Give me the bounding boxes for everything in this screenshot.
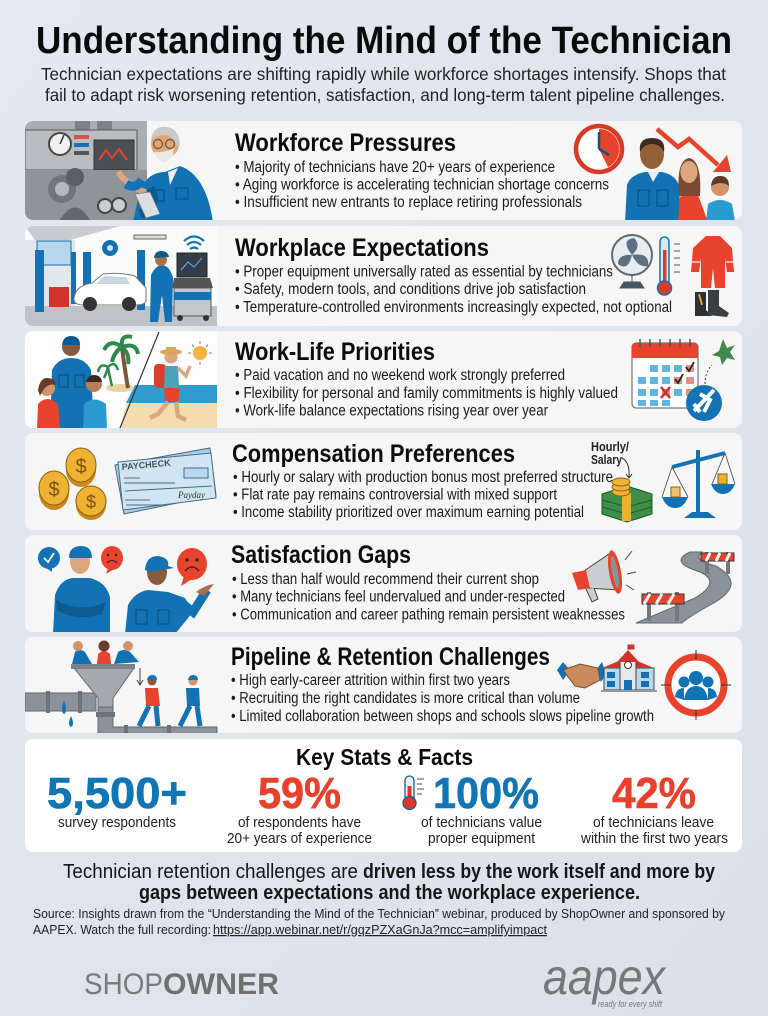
callout: hourly/salary: Salary: [591, 453, 622, 467]
subtitle: [41, 64, 726, 105]
icon: palm leaf: [712, 339, 735, 365]
bullet list: • Proper equipment universally rated as essential by technicians: [235, 264, 613, 280]
icon: check speech bubble: [38, 547, 60, 572]
illustration: gold coins: [39, 448, 106, 520]
bullet list: • Temperature-controlled environments increasingly expected, not optional: [235, 299, 672, 316]
logo: aapex: ready for every shift: [598, 999, 662, 1009]
subtitle: Technician expectations are shifting rapidly while workforce shortages intensify. Shops that: [41, 64, 726, 84]
stat: proper equipment: [421, 769, 542, 847]
conclusion statement: gaps between expectations and the workplace experience.: [139, 882, 640, 904]
heading: Work-Life Priorities: [235, 338, 435, 366]
stat: 20+ years experience: 20+ years of experience: [227, 830, 372, 847]
bullet list: • Paid vacation and no weekend work strongly preferred: [235, 367, 565, 384]
conclusion statement: driven less by the work itself and more by: [363, 861, 716, 883]
heading: Satisfaction Gaps: [231, 541, 411, 569]
bullet list: [232, 571, 625, 624]
icon: work boots: [695, 290, 729, 317]
source note: AAPEX. Watch the full recording:: [33, 923, 211, 937]
icon: sad bubble large: [177, 548, 207, 586]
subtitle: fail to adapt risk worsening retention, satisfaction, and long-term talent pipeline challenges.: [45, 85, 725, 105]
stat: early attrition: 42%: [612, 769, 696, 818]
traveler: [150, 347, 190, 420]
heading: Workforce Pressures: [235, 129, 456, 157]
bullet list: • Communication and career pathing remain persistent weaknesses: [232, 606, 625, 624]
bullet list: • Aging workforce is accelerating technician shortage concerns: [235, 176, 609, 194]
icon: sad bubble small: [101, 546, 123, 574]
illustration: talent funnel and pipe: [25, 640, 217, 735]
illustration: paycheck: PAYCHECK: [121, 458, 171, 472]
bullet list: • Safety, modern tools, and conditions drive job satisfaction: [235, 281, 586, 298]
stat: proper equipment: 100%: [433, 769, 539, 818]
logo: aapex: aapex: [543, 949, 667, 1005]
bullet list: • Many technicians feel undervalued and under-respected: [232, 588, 565, 606]
stat: survey respondents: survey respondents: [58, 814, 176, 831]
panel: compensation preferences: [25, 433, 742, 530]
stat: 20+ years experience: [227, 769, 372, 847]
icon: target with team: [661, 650, 731, 720]
bullet list: • High early-career attrition within first two years: [231, 672, 510, 689]
illustration: gold coins: $: [48, 479, 60, 501]
panel: pipeline and retention: [25, 637, 742, 735]
illustration: frustrated technicians: [53, 546, 214, 634]
icon: thermometer: [403, 776, 424, 810]
illustration: gold coins: $: [86, 492, 96, 512]
icon: balance scale: [662, 450, 735, 518]
bullet list: [235, 159, 609, 211]
bullet list: [233, 469, 613, 521]
icon: airplane badge: [686, 365, 722, 421]
icon: fan: [612, 235, 652, 288]
icon: family of workers: [625, 138, 735, 222]
stat: survey respondents: 5,500+: [47, 769, 187, 818]
bullet list: • Income stability prioritized over maximum earning potential: [233, 504, 584, 521]
stat: early attrition: within the first two years: [580, 830, 728, 847]
icon: declining arrow: [657, 129, 731, 172]
bullet list: • Flat rate pay remains controversial with mixed support: [233, 486, 558, 504]
logo: ShopOwner: SHOP: [84, 968, 163, 1001]
panel: workforce pressures: [25, 118, 742, 222]
panel: key stats: [25, 739, 742, 852]
callout: hourly/salary: [591, 440, 632, 478]
bullet list: • Majority of technicians have 20+ years of experience: [235, 159, 555, 176]
stat: 20+ years experience: of respondents have: [238, 814, 361, 831]
illustration: older technician at machine: [25, 118, 213, 222]
source note: [33, 907, 726, 937]
heading: Workplace Expectations: [235, 234, 489, 262]
callout: hourly/salary: Hourly/: [591, 440, 629, 454]
illustration: paycheck: [115, 448, 216, 514]
heading: Compensation Preferences: [232, 440, 515, 468]
stat: early attrition: of technicians leave: [593, 814, 714, 831]
source note: Source: Insights drawn from the “Understanding the Mind of the Technician” webinar, produced by ShopOwner and sponsored by: [33, 907, 726, 921]
bullet list: • Hourly or salary with production bonus most preferred structure: [233, 469, 613, 486]
panel: satisfaction gaps: [25, 535, 742, 634]
icon: winding road with barriers: [636, 552, 734, 623]
illustration: modern repair shop: [25, 226, 217, 326]
conclusion statement: [63, 861, 716, 904]
bullet list: [235, 367, 618, 420]
icon: megaphone: [572, 549, 636, 602]
panel: workplace expectations: [25, 226, 742, 326]
stat: proper equipment: proper equipment: [428, 830, 536, 847]
bullet list: • Less than half would recommend their current shop: [232, 571, 539, 588]
bullet list: • Work-life balance expectations rising year over year: [235, 402, 548, 420]
bullet list: • Recruiting the right candidates is more critical than volume: [231, 690, 580, 707]
logo: ShopOwner: OWNER: [163, 968, 279, 1001]
heading: Key Stats & Facts: [296, 744, 473, 770]
source note: https://app.webinar.net/r/gqzPZXaGnJa?mcc=amplifyimpact: [213, 923, 548, 937]
bullet list: • Insufficient new entrants to replace retiring professionals: [235, 194, 582, 211]
logo: ShopOwner: [84, 968, 279, 1001]
bullet list: • Limited collaboration between shops and schools slows pipeline growth: [231, 708, 654, 725]
illustration: paycheck: Payday: [177, 490, 205, 500]
icon: school: [601, 645, 657, 692]
icon: clock: [576, 126, 622, 172]
heading: Pipeline & Retention Challenges: [231, 643, 550, 671]
panel: work-life priorities: [25, 331, 742, 430]
stat: 20+ years experience: 59%: [258, 769, 341, 818]
icon: thermometer: [658, 237, 680, 295]
bullet list: [231, 672, 654, 725]
illustration: gold coins: $: [75, 456, 87, 478]
icon: red coverall: [691, 236, 734, 288]
bullet list: [235, 264, 672, 316]
bullet list: • Flexibility for personal and family commitments is highly valued: [235, 385, 618, 402]
conclusion statement: Technician retention challenges are: [63, 861, 358, 883]
icon: calendar: [632, 339, 698, 408]
stat: proper equipment: of technicians value: [421, 814, 542, 831]
illustration: family and beach traveler: [25, 331, 217, 430]
icon: cash and coins: [602, 478, 652, 522]
stat: early attrition: [580, 769, 728, 847]
icon: handshake: [557, 662, 606, 688]
